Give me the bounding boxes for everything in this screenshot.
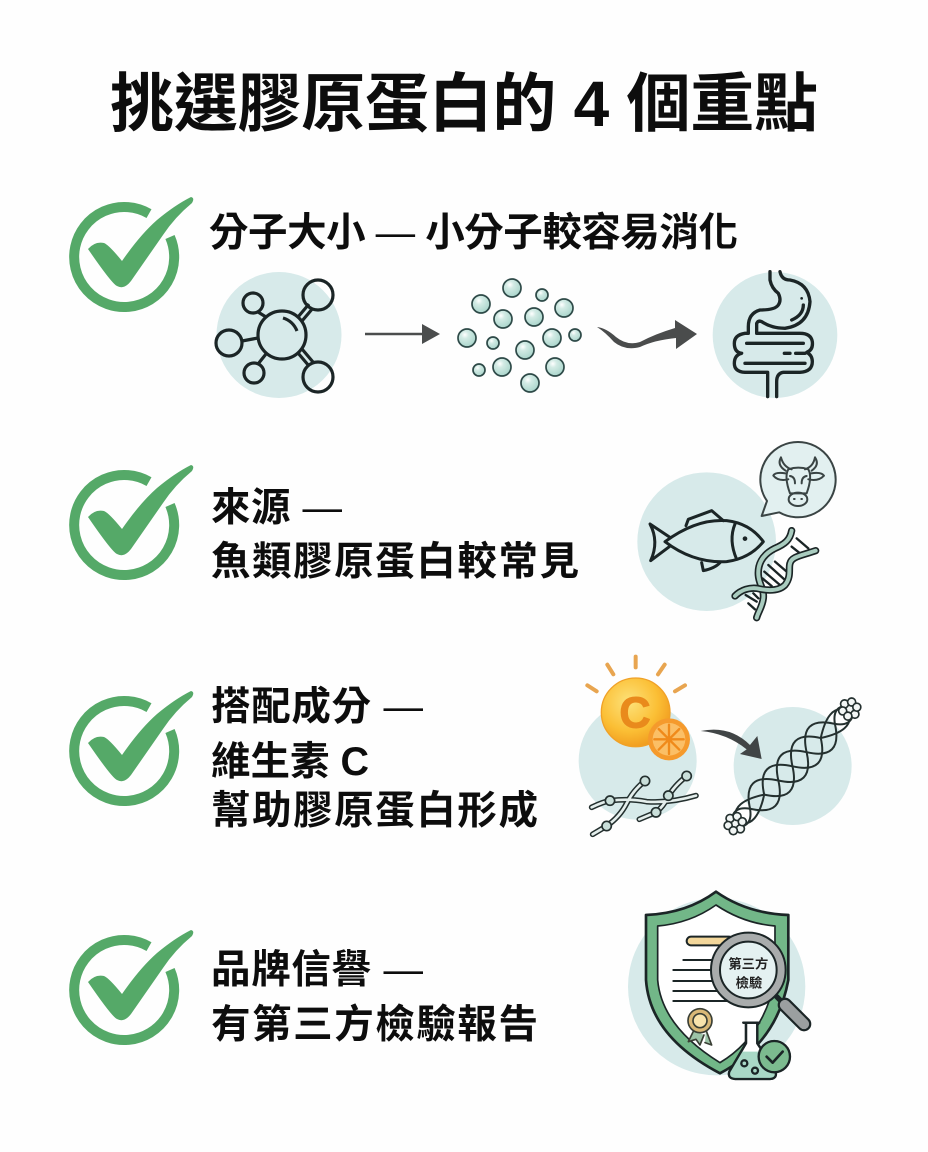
icon: certified shield illustration — [628, 892, 805, 1079]
icon: digestive system — [713, 272, 837, 398]
panel: molecule size — [74, 197, 837, 398]
arrow: breakdown — [365, 324, 440, 344]
icon: cow speech bubble — [760, 442, 836, 517]
icon: collagen fibre rope — [717, 691, 868, 842]
icon: amino acid strands — [592, 771, 696, 834]
icon: check mark 2 — [74, 465, 193, 575]
icon: vitamin C sun — [587, 657, 690, 760]
icon: vitamin C sun: C — [619, 690, 651, 738]
icon: flask with check — [729, 1023, 790, 1079]
text: third party report: 有第三方檢驗報告 — [211, 1003, 538, 1047]
icon: fish — [650, 511, 763, 571]
icon: check mark 1 — [74, 197, 193, 307]
heading: ingredients: 搭配成分 — — [211, 685, 424, 729]
panel: source — [74, 442, 836, 618]
heading: molecule size: 分子大小 — 小分子較容易消化 — [209, 211, 738, 255]
panel: brand reputation — [74, 892, 805, 1079]
icon: small peptides — [458, 279, 581, 392]
icon: large collagen molecule — [216, 272, 342, 398]
icon: magnifier: 第三方 — [728, 955, 768, 971]
icon: dna helix — [735, 531, 816, 618]
text: helps collagen formation: 幫助膠原蛋白形成 — [211, 789, 538, 833]
icon: check mark 4 — [74, 930, 193, 1040]
heading: source: 來源 — — [211, 486, 342, 530]
certificate lines — [673, 937, 733, 1001]
icon: magnifier — [711, 933, 804, 1024]
panel: vitamin C — [74, 657, 868, 842]
title: 挑選膠原蛋白的 4 個重點 — [110, 68, 818, 140]
icon: vitamin C to collagen illustration — [579, 657, 868, 842]
icon: magnifier: 檢驗 — [736, 974, 762, 990]
text: fish collagen: 魚類膠原蛋白較常見 — [211, 540, 579, 584]
icon: medal — [688, 1009, 712, 1045]
text: vitamin C: 維生素 C — [211, 740, 369, 784]
heading: brand reputation: 品牌信譽 — — [211, 948, 424, 992]
icon: check mark 3 — [74, 691, 193, 801]
icon: shield — [646, 892, 788, 1073]
arrow: wavy to gut — [597, 320, 697, 349]
icon: fish cow dna illustration — [637, 442, 836, 618]
arrow: forms collagen — [701, 730, 762, 759]
